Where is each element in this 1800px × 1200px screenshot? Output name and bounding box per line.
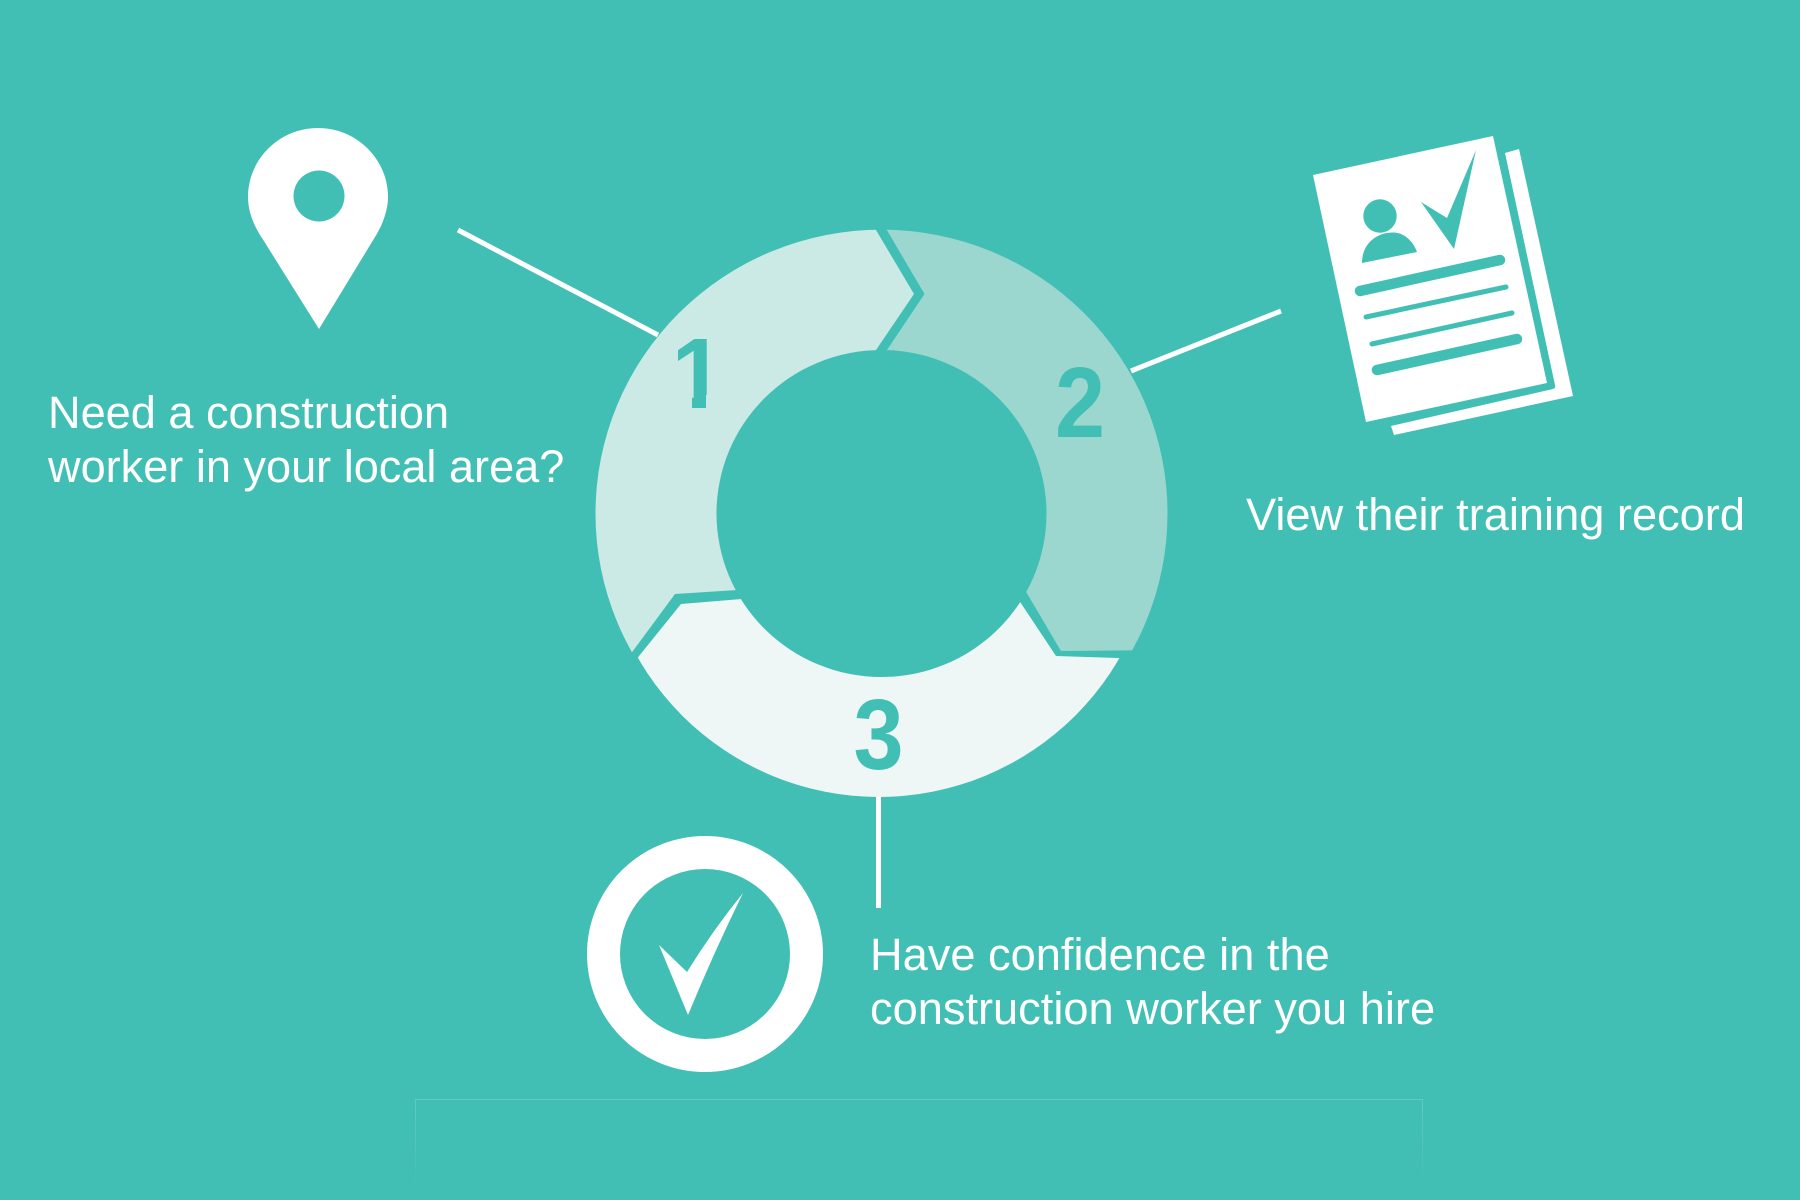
text: step 3 <box>870 929 1435 1034</box>
icon: training record document <box>1313 136 1573 435</box>
faint empty frame at bottom <box>416 1100 1422 1185</box>
text: step 3: Have confidence in the <box>870 929 1330 980</box>
check mark <box>1421 150 1476 249</box>
back sheet <box>1391 149 1573 435</box>
number 1: 1 <box>672 318 724 430</box>
icon: location pin <box>248 128 388 329</box>
text: step 1: Need a construction <box>48 387 449 438</box>
text: step 3: construction worker you hire <box>870 983 1435 1034</box>
connector line: step 1 <box>458 230 658 335</box>
number 3: 3 <box>853 680 904 791</box>
ring segment 2 <box>886 230 1168 651</box>
icon: check mark in circle <box>604 852 806 1056</box>
number 2: 2 <box>1055 348 1105 459</box>
person body <box>1362 232 1417 263</box>
text lines <box>1360 260 1517 370</box>
person head <box>1363 199 1397 233</box>
text: step 2: View their training record <box>1246 489 1745 540</box>
ring segment 1 <box>596 230 914 652</box>
cycle diagram ring <box>595 230 1168 797</box>
text: step 1 <box>47 387 564 492</box>
front sheet <box>1313 136 1547 422</box>
ring segment 3 <box>638 599 1120 797</box>
connector line: step 3 <box>876 790 881 908</box>
connector line: step 2 <box>1131 311 1281 371</box>
text: step 1: worker in your local area? <box>47 441 564 492</box>
